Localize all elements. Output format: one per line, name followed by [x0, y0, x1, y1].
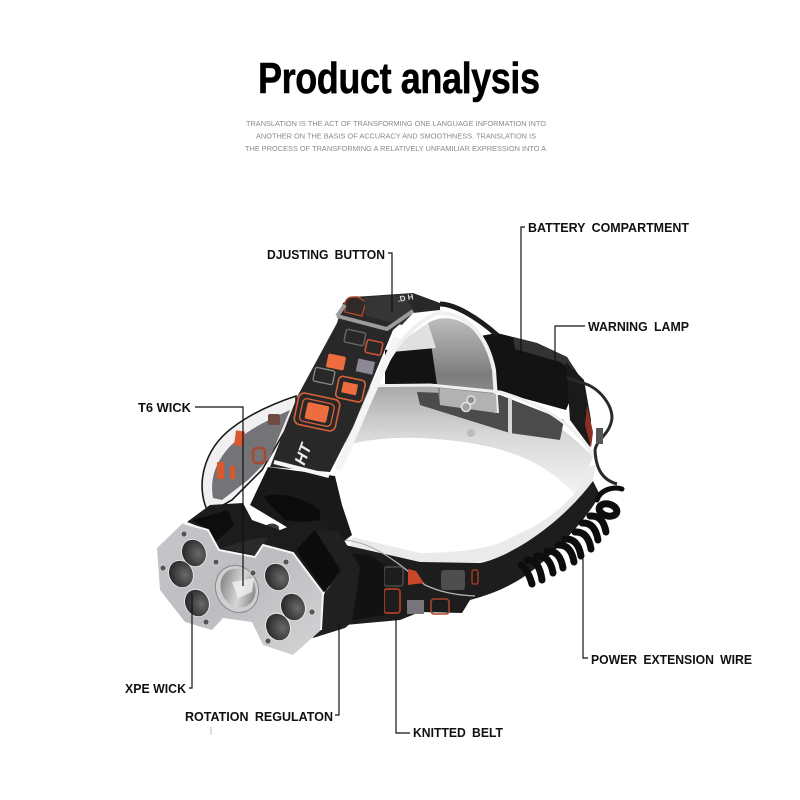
T6 wick center lens	[208, 558, 266, 620]
callout: rotation regulator: ROTATION REGULATON	[185, 709, 333, 724]
subtitle text block: ANOTHER ON THE BASIS OF ACCURACY AND SMOOTHNESS. TRANSLATION IS	[256, 134, 536, 140]
clear dome strap	[356, 313, 595, 458]
lamp front plate	[157, 523, 323, 655]
knitted belt pattern	[384, 567, 478, 614]
battery compartment	[385, 333, 593, 448]
callout: battery compartment	[521, 220, 689, 372]
title: Product analysis	[258, 54, 540, 103]
callout: T6 wick	[138, 400, 243, 586]
callout: power extension wire: POWER EXTENSION WIRE	[591, 652, 752, 667]
main head strap: .D H	[397, 292, 414, 304]
main head strap	[270, 292, 440, 472]
clear plastic back plate	[345, 385, 593, 495]
plate screws	[160, 531, 315, 644]
XPE wick lamps left	[164, 535, 214, 621]
callout: warning lamp	[555, 319, 689, 405]
power extension wire	[567, 378, 617, 484]
callout: adjusting button	[267, 247, 392, 312]
callout: knitted belt: KNITTED BELT	[413, 725, 503, 740]
subtitle text block: TRANSLATION IS THE ACT OF TRANSFORMING ONE LANGUAGE INFORMATION INTO	[246, 121, 547, 128]
XPE wick lamps right	[260, 559, 310, 645]
callout: rotation regulator	[185, 623, 339, 724]
callout: adjusting button: DJUSTING BUTTON	[267, 247, 385, 262]
callout: warning lamp: WARNING LAMP	[588, 319, 689, 334]
subtitle text block: THE PROCESS OF TRANSFORMING A RELATIVELY UNFAMILIAR EXPRESSION INTO A	[245, 146, 546, 153]
callout: knitted belt	[396, 614, 503, 740]
belt clamp	[345, 552, 384, 620]
headlamp illustration	[157, 292, 622, 735]
main head strap: HT	[292, 440, 316, 467]
callout: power extension wire	[583, 559, 752, 667]
mount bracket	[250, 462, 352, 548]
callout: T6 wick: T6 WICK	[138, 400, 192, 415]
strap arc behind dome	[440, 304, 497, 335]
small grey mark	[210, 727, 212, 735]
callout: battery compartment: BATTERY COMPARTMENT	[528, 220, 689, 235]
subtitle text block	[245, 121, 547, 153]
front ring white liner and black band	[340, 465, 600, 625]
rear left strap inner side	[202, 396, 296, 510]
coiled wire	[521, 488, 622, 584]
lamp housing top	[187, 503, 345, 593]
callout: XPE wick	[125, 594, 192, 696]
right side clamp	[313, 530, 360, 638]
callout: XPE wick: XPE WICK	[125, 681, 187, 696]
